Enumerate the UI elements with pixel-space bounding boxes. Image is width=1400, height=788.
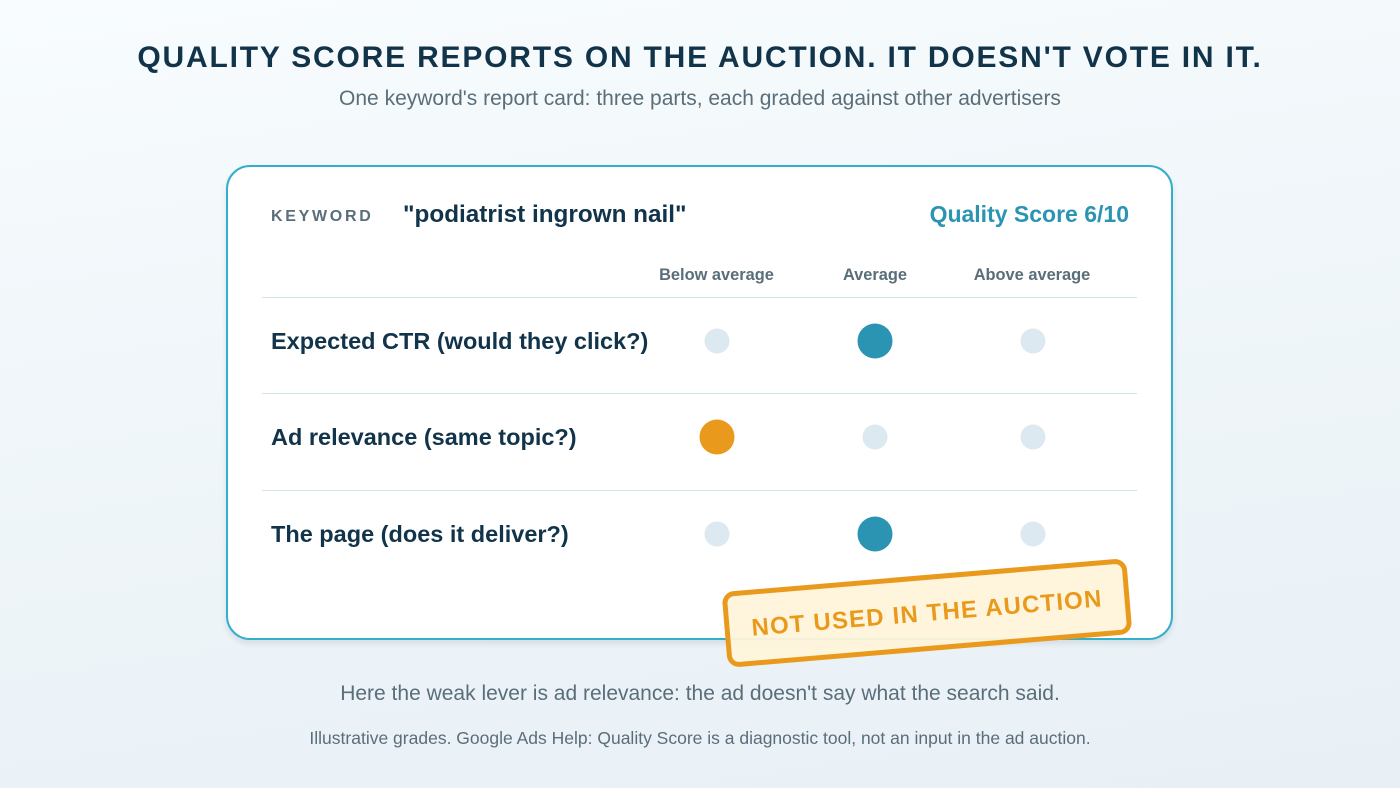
- column header: above average: Above average: [974, 266, 1090, 284]
- rating: below average, selected: [700, 420, 734, 454]
- title: QUALITY SCORE REPORTS ON THE AUCTION. IT DOESN'T VOTE IN IT.: [137, 41, 1263, 74]
- rating: average, selected: [858, 516, 892, 552]
- row label: expected CTR: Expected CTR (would they click?): [271, 328, 648, 354]
- rating: average, empty: [862, 424, 888, 450]
- keyword value: "podiatrist ingrown nail": [403, 201, 687, 228]
- rating: below average, empty: [704, 328, 730, 354]
- rating: below average, empty: [704, 522, 730, 546]
- rating: above average, empty: [1020, 522, 1045, 546]
- takeaway: Here the weak lever is ad relevance: the ad doesn't say what the search said.: [340, 682, 1060, 705]
- rating: above average, empty: [1020, 328, 1045, 354]
- keyword label: KEYWORD: [271, 208, 373, 225]
- row label: the page: The page (does it deliver?): [271, 521, 569, 547]
- rating: above average, empty: [1020, 424, 1045, 450]
- source note: Illustrative grades. Google Ads Help: Quality Score is a diagnostic tool, not an input in the ad auction.: [309, 728, 1091, 748]
- panel: report card: [226, 165, 1173, 640]
- rating: average, selected: [858, 324, 892, 358]
- stamp: not used in the auction: NOT USED IN THE AUCTION: [750, 585, 1104, 641]
- row label: ad relevance: Ad relevance (same topic?): [271, 424, 577, 450]
- stamp: not used in the auction: [722, 558, 1132, 667]
- column header: average: Average: [843, 266, 907, 284]
- column header: below average: Below average: [659, 266, 774, 284]
- subtitle: One keyword's report card: three parts, each graded against other advertisers: [339, 87, 1061, 110]
- quality score: Quality Score 6/10: [930, 201, 1129, 227]
